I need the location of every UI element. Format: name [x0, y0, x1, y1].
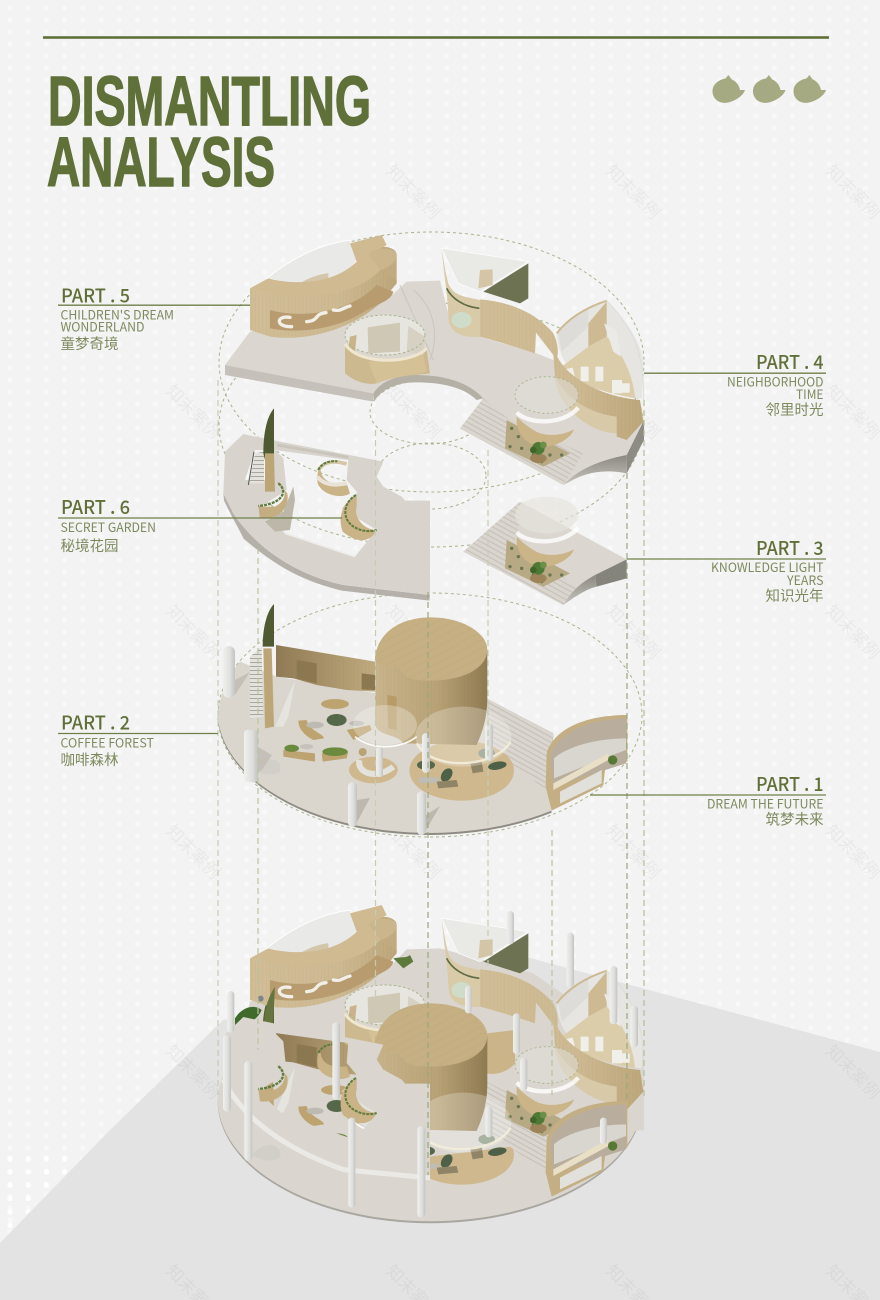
background — [8, 1156, 82, 1228]
label: part 4: TIME — [796, 384, 824, 403]
label: part 1: DREAM THE FUTURE — [707, 794, 824, 812]
cafe furniture — [252, 682, 507, 788]
back wall with doors, stairs, green panel — [250, 604, 375, 728]
disc floor — [218, 662, 553, 835]
top rule — [43, 36, 829, 39]
part 5 wood arch — [250, 235, 397, 338]
label: part 4: NEIGHBORHOOD — [727, 372, 824, 391]
layer: part 2 coffee forest and part 1 dream the future — [218, 604, 627, 835]
label: part 4: 邻里时光 — [766, 402, 824, 419]
label: part 2: PART . 2 — [61, 708, 130, 736]
title: DISMANTLING — [48, 62, 371, 140]
part 4 leaf room — [557, 301, 643, 400]
watermarks: 知末案例 — [602, 381, 664, 443]
label: part 3: 知识光年 — [766, 588, 824, 605]
label: part 5 — [58, 282, 250, 353]
north-east glass wedge and S-wall — [442, 248, 643, 440]
composite second floor objects — [252, 1003, 627, 1197]
planter ring right — [341, 495, 377, 540]
watermarks: 知末案例 — [382, 601, 444, 663]
label: part 1 — [590, 770, 826, 828]
composite columns — [223, 911, 638, 1218]
part 1 curved room — [546, 715, 627, 811]
label: part 3 — [627, 534, 826, 605]
label: part 1: 筑梦未来 — [766, 812, 824, 828]
label: part 3: PART . 3 — [756, 534, 824, 561]
dashed guide ellipses — [218, 232, 644, 837]
grey ground plane — [0, 958, 880, 1300]
label: part 5: WONDERLAND — [60, 317, 144, 336]
watermarks: 知末案例 — [602, 821, 664, 883]
label: part 6: PART . 6 — [61, 493, 130, 520]
label: part 2 — [58, 708, 218, 769]
label: part 1: PART . 1 — [756, 770, 824, 797]
watermarks: 知末案例 — [162, 821, 224, 883]
layer: top floor, parts 5 and 4 — [225, 235, 644, 485]
dashed vertical guides — [218, 380, 644, 1175]
label: part 4 — [644, 348, 826, 419]
watermarks: 知末案例 — [602, 601, 664, 663]
planter ring left — [258, 482, 288, 519]
layer: part 6 secret garden — [223, 408, 430, 601]
composite base disc — [218, 977, 643, 1223]
label: part 3: KNOWLEDGE LIGHT — [711, 557, 824, 576]
watermarks: 知末案例 — [602, 161, 664, 223]
composite upper walls — [235, 905, 643, 1137]
label: part 6: 秘境花园 — [60, 537, 118, 555]
label: part 5: PART . 5 — [61, 282, 130, 308]
label: part 2: COFFEE FOREST — [60, 732, 154, 752]
watermarks: 知末案例 — [382, 161, 444, 223]
title — [47, 62, 371, 201]
layer: part 3 knowledge light years — [463, 497, 627, 605]
label: part 4: PART . 4 — [756, 348, 824, 375]
title: ANALYSIS — [47, 123, 275, 201]
watermarks: 知末案例 — [382, 821, 444, 883]
watermarks — [162, 161, 880, 1300]
watermarks: 知末案例 — [162, 381, 224, 443]
watermarks: 知末案例 — [162, 601, 224, 663]
wooden cylinder — [353, 617, 511, 767]
label: part 3: YEARS — [786, 570, 824, 589]
watermarks: 知末案例 — [162, 1041, 224, 1103]
tall green panel — [263, 408, 274, 460]
watermarks: 知末案例 — [382, 381, 444, 443]
composite upper floor fill — [230, 948, 644, 1173]
label: part 6 — [58, 493, 342, 555]
composite part 6 floor — [223, 1017, 430, 1178]
planter ring centre — [317, 470, 350, 496]
label: part 5: CHILDREN'S DREAM — [60, 304, 174, 323]
columns: part 2 layer — [223, 646, 493, 835]
label: part 5: 童梦奇境 — [60, 335, 118, 353]
knowledge module in place — [505, 377, 578, 467]
composite: assembled model — [218, 905, 644, 1223]
circular glass booth — [345, 315, 430, 384]
label: part 2: 咖啡森林 — [60, 752, 119, 769]
label: part 6: SECRET GARDEN — [60, 517, 156, 536]
icons: three leaf marks — [712, 75, 826, 103]
